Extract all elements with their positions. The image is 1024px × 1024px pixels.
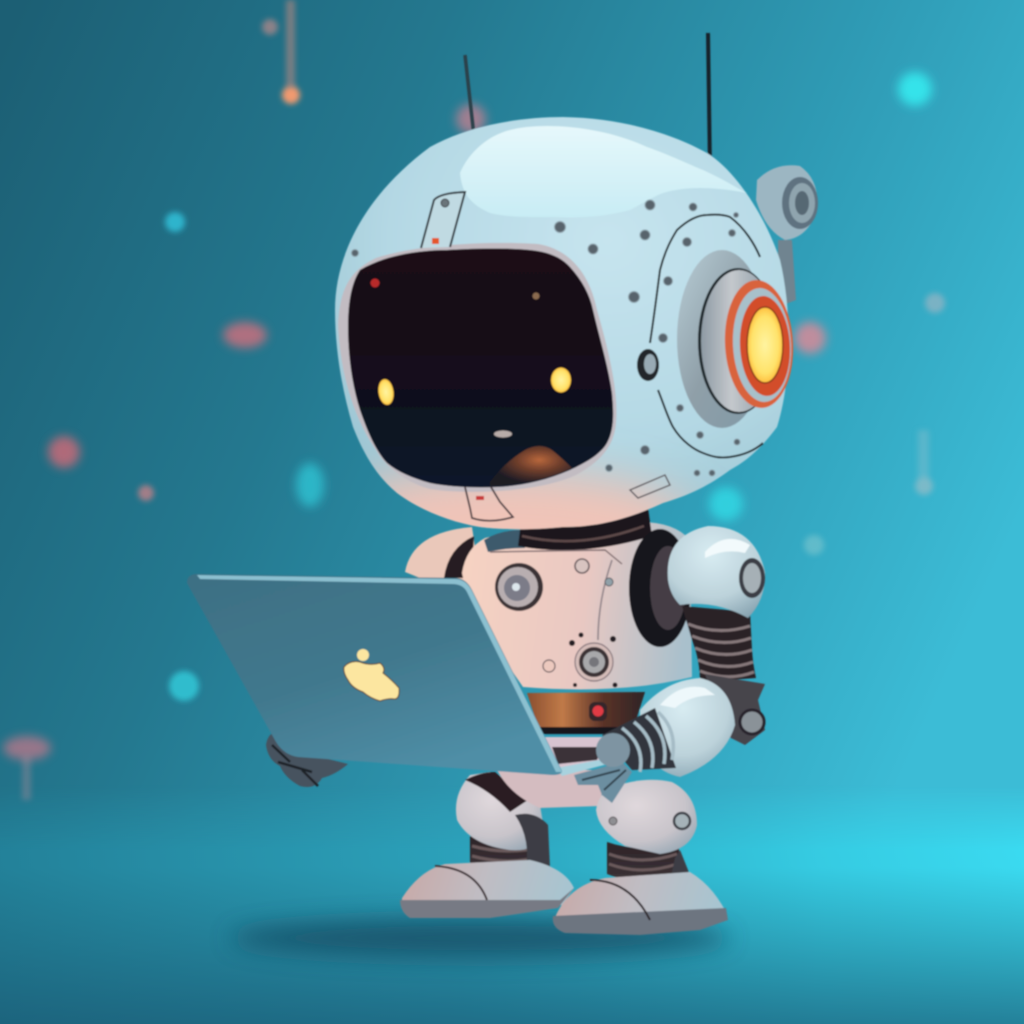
belt bbox=[527, 692, 645, 734]
front leg bbox=[553, 780, 728, 935]
head highlight bbox=[460, 126, 747, 217]
keyboard base bbox=[545, 737, 605, 772]
antennas bbox=[465, 33, 710, 170]
left hand bbox=[266, 732, 348, 787]
head bbox=[334, 116, 818, 531]
eye: right bbox=[551, 368, 571, 392]
ear: rear cylinder bbox=[756, 165, 818, 304]
logo bbox=[344, 649, 399, 701]
elbow bracket bbox=[705, 674, 765, 745]
head shell bbox=[335, 117, 789, 529]
chest lens bbox=[495, 563, 543, 611]
chin panel bbox=[465, 487, 513, 521]
visor reflection bbox=[490, 446, 572, 486]
floating bokeh lights bbox=[3, 0, 945, 800]
front shoe bbox=[553, 872, 728, 935]
eye: left bbox=[377, 378, 395, 406]
rear shoe bbox=[400, 860, 574, 918]
pelvis bbox=[497, 770, 605, 808]
shoulder ball bbox=[668, 526, 765, 618]
front forearm and hand bbox=[574, 678, 735, 803]
forehead panel bbox=[421, 192, 465, 248]
chest button bbox=[575, 643, 613, 681]
seam lines bbox=[650, 215, 763, 458]
floor shadow bbox=[230, 918, 730, 958]
side button bbox=[637, 349, 659, 381]
rear leg bbox=[400, 772, 574, 918]
laptop bbox=[187, 574, 610, 776]
head lower warm shade bbox=[368, 455, 698, 531]
robot bbox=[187, 33, 818, 935]
forearm ball bbox=[640, 678, 735, 777]
right shoulder and upper arm bbox=[629, 526, 765, 745]
rivets bbox=[352, 200, 740, 476]
forearm coil bbox=[602, 708, 676, 770]
lid bbox=[187, 574, 562, 775]
glowing ear lens bbox=[677, 250, 796, 428]
visor bbox=[338, 243, 616, 492]
torso bbox=[405, 508, 692, 734]
upper arm coil bbox=[682, 606, 756, 682]
hand bbox=[574, 762, 632, 803]
